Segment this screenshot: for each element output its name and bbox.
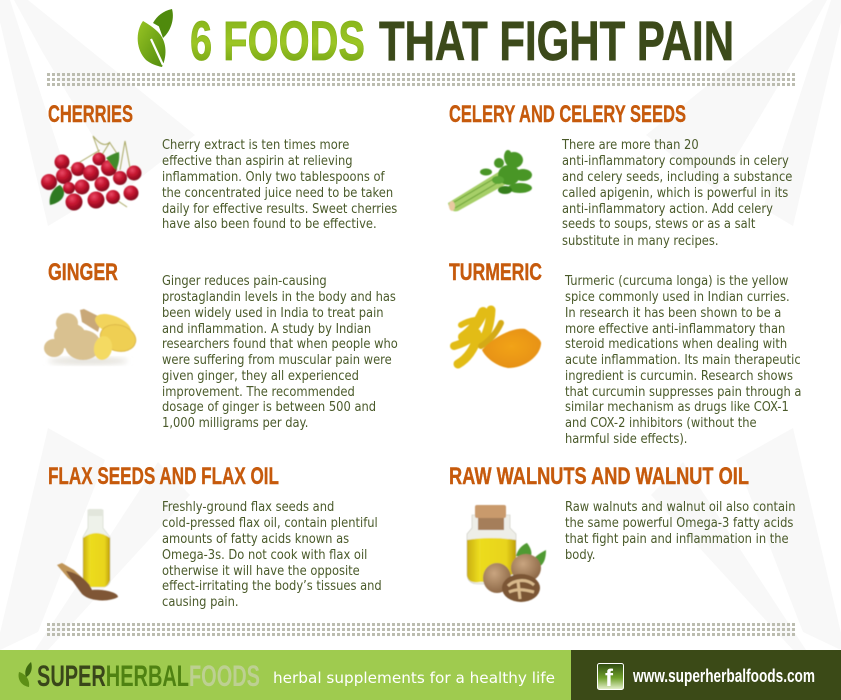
icon: walnut oil and walnuts xyxy=(467,505,546,602)
footer band xyxy=(0,650,841,700)
body text: ingredient is curcumin. Research shows xyxy=(565,368,793,383)
top dotted divider xyxy=(47,73,796,87)
body text: were suffering from muscular pain were xyxy=(162,352,392,367)
body text: steroid medications when dealing with xyxy=(565,336,787,351)
body text: spice commonly used in Indian curries. xyxy=(565,289,790,304)
icon: flax oil and seeds xyxy=(57,509,118,600)
panel: turmeric xyxy=(449,259,801,446)
body text: called apigenin, which is powerful in its xyxy=(562,185,788,200)
body text xyxy=(565,499,796,562)
body text: similar mechanism as drugs like COX-1 xyxy=(565,399,789,414)
body text xyxy=(564,273,801,446)
body text: Omega-3s. Do not cook with flax oil xyxy=(162,547,367,562)
body text: There are more than 20 xyxy=(561,137,699,152)
body text: been widely used in India to treat pain xyxy=(162,305,384,320)
body text: amounts of fatty acids known as xyxy=(162,531,349,546)
body text: the concentrated juice need to be taken xyxy=(162,185,393,200)
body text: causing pain. xyxy=(162,594,239,609)
body text: otherwise it will have the opposite xyxy=(162,563,360,578)
heading: FLAX SEEDS AND FLAX OIL xyxy=(48,463,279,490)
body text xyxy=(162,137,397,231)
body text: improvement. The recommended xyxy=(162,384,355,399)
icon: celery xyxy=(448,150,532,211)
body text: effective than aspirin at relieving xyxy=(162,153,353,168)
title xyxy=(138,9,734,72)
body text: Turmeric (curcuma longa) is the yellow xyxy=(564,273,788,288)
body text: body. xyxy=(565,547,595,562)
panel: walnuts xyxy=(449,463,796,602)
body text xyxy=(561,137,792,248)
body text: anti-inflammatory compounds in celery xyxy=(562,153,789,168)
body text: Cherry extract is ten times more xyxy=(162,137,349,152)
icon: facebook: f xyxy=(605,665,614,692)
panel: ginger xyxy=(44,259,398,430)
footer tagline: herbal supplements for a healthy life xyxy=(273,669,555,687)
footer logo: SUPERHERBALFOODS xyxy=(37,660,260,693)
body text: inflammation. Only two tablespoons of xyxy=(162,169,385,184)
body text: researchers found that when people who xyxy=(162,336,398,351)
body text: Freshly-ground flax seeds and xyxy=(162,499,334,514)
body text: seeds to soups, stews or as a salt xyxy=(562,216,756,231)
title text green: 6 FOODS xyxy=(190,9,365,72)
body text: effect-irritating the body’s tissues and xyxy=(162,578,382,593)
heading: TURMERIC xyxy=(449,259,542,286)
icon: cherries xyxy=(41,136,142,210)
body text: dosage of ginger is between 500 and xyxy=(162,399,376,414)
body text xyxy=(162,273,398,430)
body text: substitute in many recipes. xyxy=(562,233,718,248)
icon: ginger xyxy=(44,309,139,365)
body text xyxy=(162,499,382,609)
body text: that fight pain and inflammation in the xyxy=(565,531,789,546)
body text: Ginger reduces pain-causing xyxy=(162,273,327,288)
body text: and celery seeds, including a substance xyxy=(562,169,792,184)
body text: the same powerful Omega-3 fatty acids xyxy=(565,515,793,530)
body text: anti-inflammatory action. Add celery xyxy=(562,201,773,216)
panel: flax xyxy=(48,463,382,609)
panel: cherries xyxy=(41,101,397,231)
body text: that curcumin suppresses pain through a xyxy=(565,384,801,399)
body text: harmful side effects). xyxy=(565,431,687,446)
body text: acute inflammation. Its main therapeutic xyxy=(565,352,801,367)
heading: CHERRIES xyxy=(48,101,133,128)
body text: and COX-2 inhibitors (without the xyxy=(565,415,757,430)
panel: celery xyxy=(448,101,792,248)
body text: daily for effective results. Sweet cherries xyxy=(162,201,397,216)
icon: leaves xyxy=(138,9,173,67)
heading: RAW WALNUTS AND WALNUT OIL xyxy=(449,463,749,490)
icon: logo leaves xyxy=(19,662,32,687)
heading: CELERY AND CELERY SEEDS xyxy=(449,101,686,128)
heading: GINGER xyxy=(48,259,118,286)
body text: more effective anti-inflammatory than xyxy=(565,321,785,336)
bottom dotted divider xyxy=(47,623,796,637)
body text: have also been found to be effective. xyxy=(162,216,377,231)
body text: prostaglandin levels in the body and has xyxy=(162,289,396,304)
body text: In research it has been shown to be a xyxy=(565,305,781,320)
icon: facebook xyxy=(598,664,624,692)
body text: 1,000 milligrams per day. xyxy=(162,415,308,430)
body text: and inflammation. A study by Indian xyxy=(162,321,371,336)
body text: cold-pressed flax oil, contain plentiful xyxy=(162,515,378,530)
title text dark: THAT FIGHT PAIN xyxy=(379,9,734,72)
body text: given ginger, they all experienced xyxy=(162,368,359,383)
icon: turmeric xyxy=(454,310,541,368)
body text: Raw walnuts and walnut oil also contain xyxy=(565,499,796,514)
